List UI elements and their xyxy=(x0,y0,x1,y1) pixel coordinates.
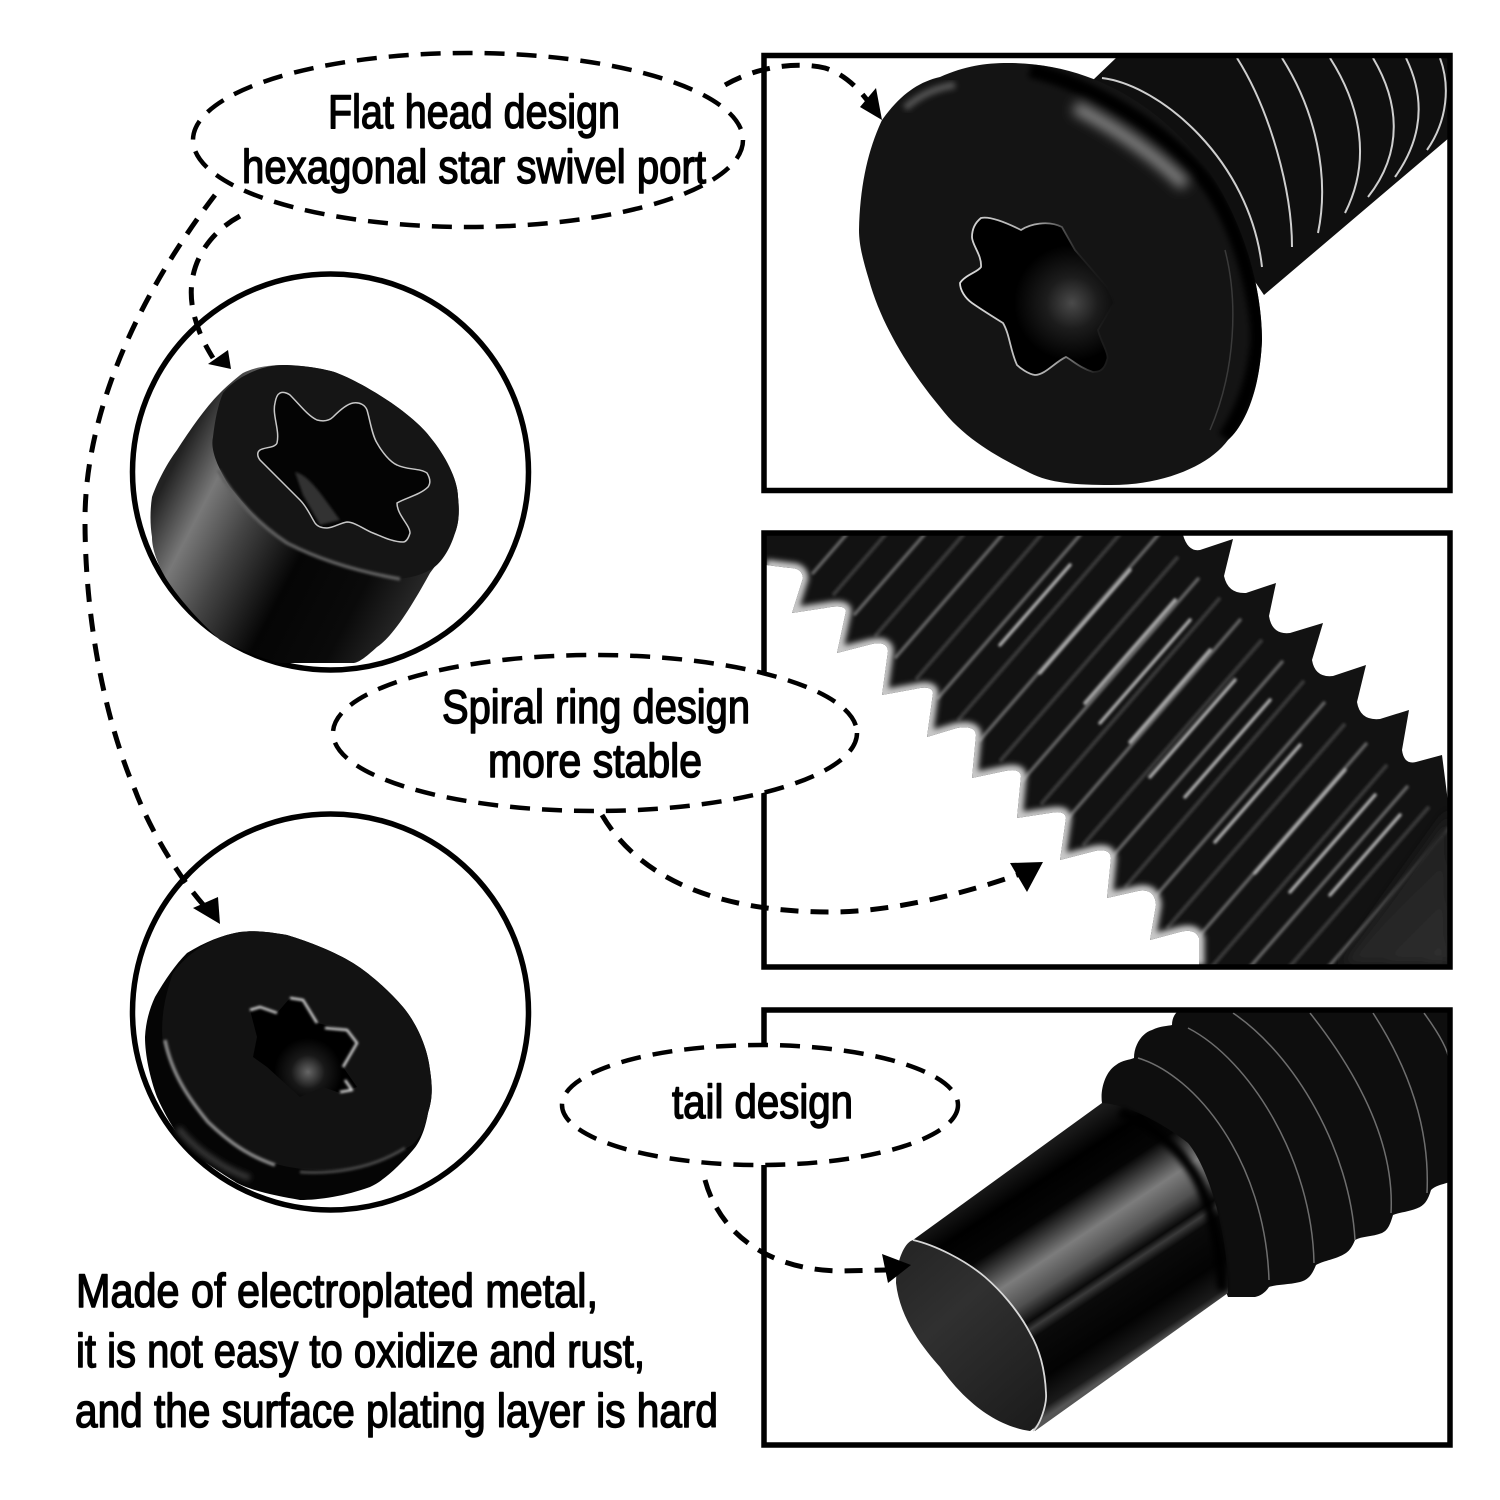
arrow: flat head callout to head panel xyxy=(725,65,882,120)
circle outline xyxy=(132,814,528,1210)
callout text xyxy=(442,680,750,787)
callout: spiral ring design xyxy=(333,655,857,811)
arrow: spiral callout to thread panel xyxy=(602,815,1043,912)
star socket xyxy=(250,998,357,1097)
cylinder base shadow xyxy=(1120,1112,1222,1290)
threaded bolt body xyxy=(766,535,1448,965)
screw shaft with threads xyxy=(1093,58,1450,295)
arrow: tail callout to tip panel xyxy=(705,1180,911,1283)
frame xyxy=(764,533,1450,967)
arrow: callout to underside circle xyxy=(85,195,220,924)
rim highlight xyxy=(165,1040,275,1165)
panel: flat head close-up xyxy=(764,56,1450,490)
text block: material description xyxy=(75,1264,718,1437)
torx socket xyxy=(960,218,1114,375)
head face xyxy=(162,931,432,1170)
thread highlights xyxy=(766,536,1448,964)
circle outline xyxy=(132,274,528,670)
fade on teeth edge xyxy=(766,565,1199,965)
screw head xyxy=(859,63,1262,485)
socket glints xyxy=(250,998,357,1092)
smooth cylinder tip xyxy=(913,1103,1228,1431)
callout text: Spiral ring design xyxy=(442,680,750,733)
text block: material description: and the surface plating layer is hard xyxy=(75,1384,718,1437)
callout text: more stable xyxy=(488,734,702,787)
flat end face xyxy=(896,1240,1046,1431)
circle: underside of flat head close-up xyxy=(132,814,528,1210)
callout: tail design xyxy=(562,1045,958,1165)
end face rim xyxy=(913,1240,1046,1431)
circle: hex star socket close-up xyxy=(132,274,528,670)
callout text: Flat head design xyxy=(328,85,620,138)
callout: flat head design xyxy=(193,53,743,227)
callout text: hexagonal star swivel port xyxy=(242,140,706,193)
edge highlight xyxy=(218,470,400,579)
threaded section xyxy=(1102,1012,1450,1297)
screw end face xyxy=(212,365,459,578)
socket inner shading xyxy=(295,472,340,525)
screw outer edge xyxy=(145,931,432,1200)
frame xyxy=(764,1010,1450,1445)
thread lines xyxy=(1138,1058,1269,1280)
callout text xyxy=(242,85,706,193)
panel: tail design close-up xyxy=(764,1010,1450,1445)
text block: material description: Made of electroplated metal, xyxy=(76,1264,598,1317)
head rim shading and highlights xyxy=(905,70,1258,438)
screw body xyxy=(150,365,459,663)
callout text: tail design xyxy=(672,1075,853,1128)
hexalobular socket xyxy=(258,392,430,542)
frame xyxy=(764,56,1450,490)
text block: material description: it is not easy to oxidize and rust, xyxy=(76,1324,645,1377)
arrow: callout to star socket circle xyxy=(191,216,240,369)
panel: spiral thread close-up xyxy=(761,530,1453,970)
